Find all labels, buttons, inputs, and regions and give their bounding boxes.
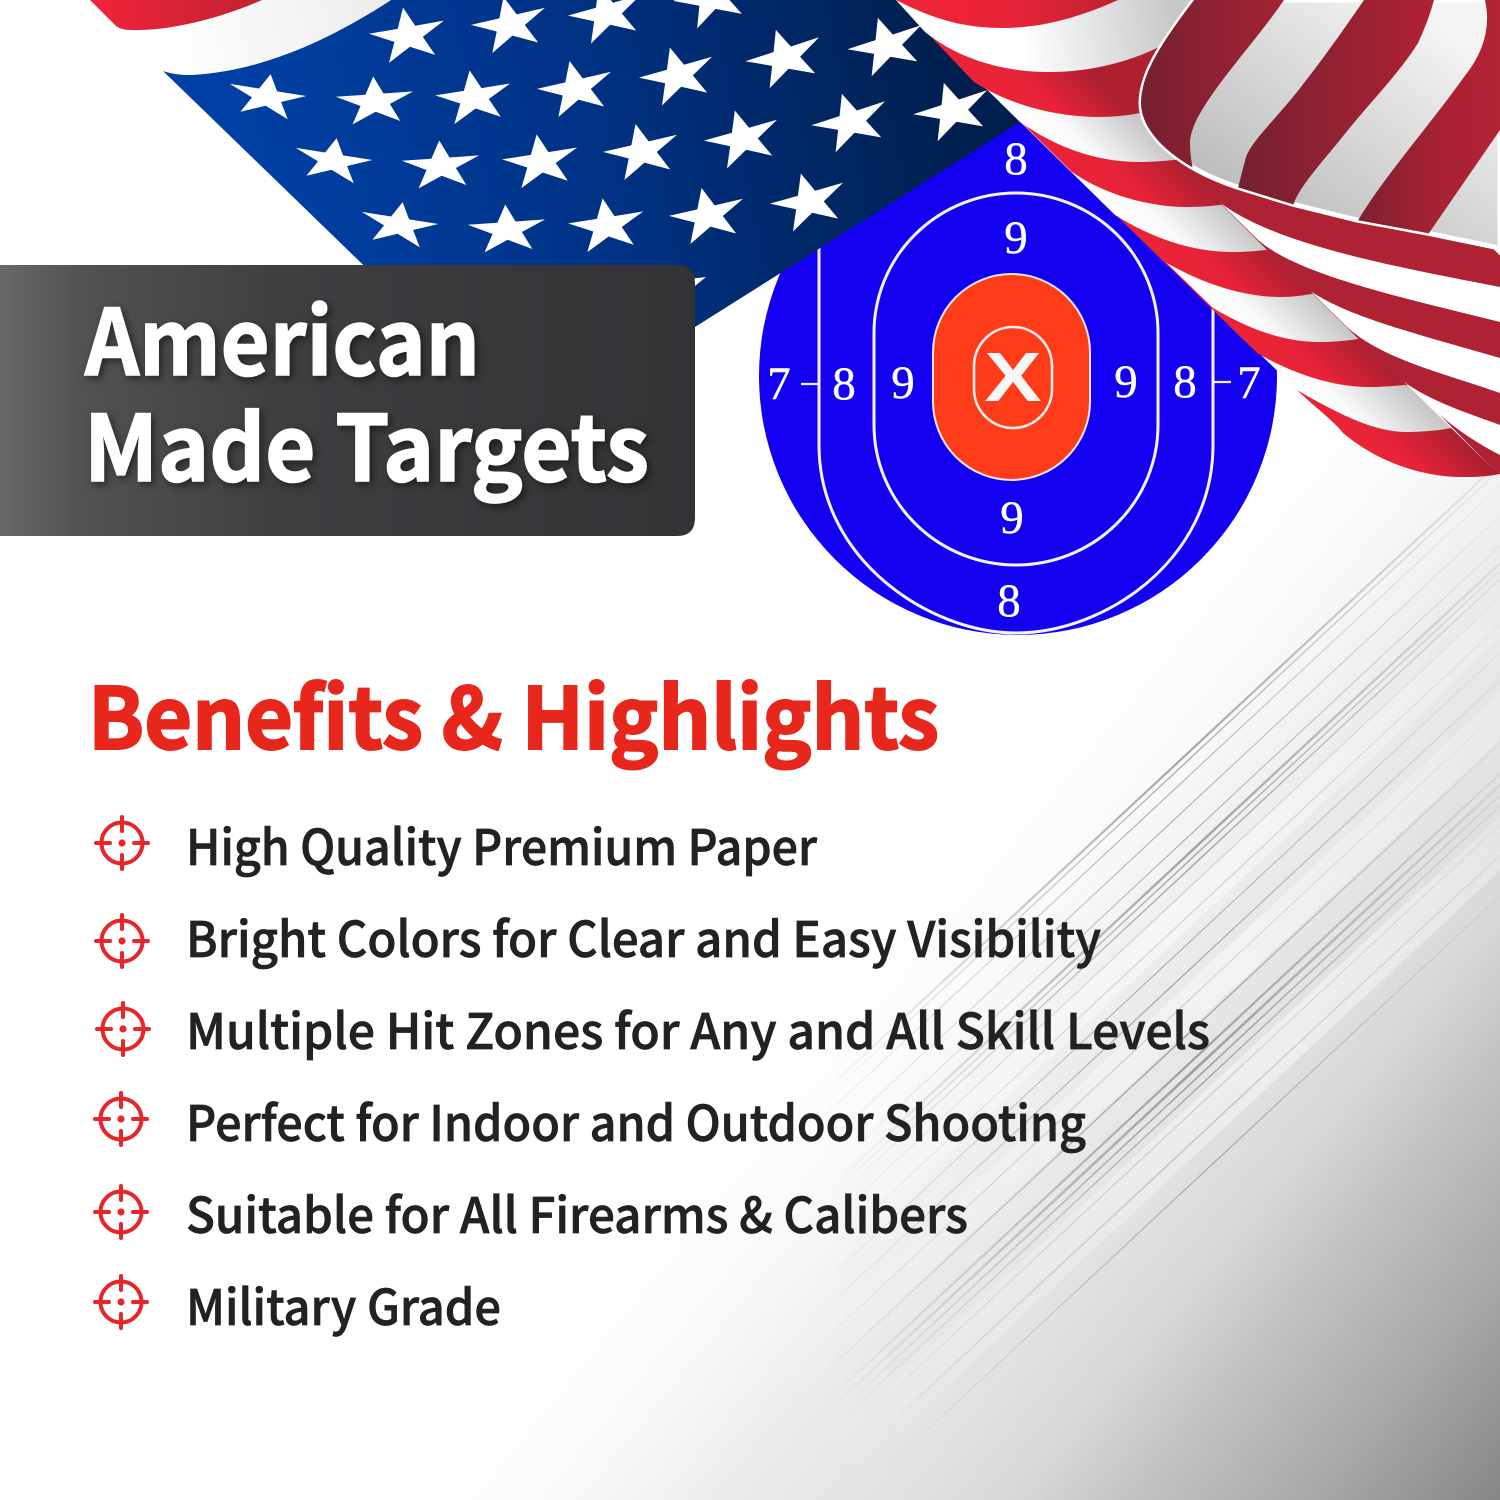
score numbers: 8 xyxy=(1004,133,1028,185)
flag stars xyxy=(226,0,997,290)
panel background xyxy=(0,265,695,536)
title text: Made Targets xyxy=(84,376,649,508)
title text: American xyxy=(84,270,480,402)
score numbers: 7 xyxy=(1237,357,1261,409)
score numbers: 8 xyxy=(1173,356,1197,408)
score numbers: 9 xyxy=(1000,492,1024,544)
benefit 4: Perfect for Indoor and Outdoor Shooting xyxy=(186,1085,1086,1156)
score numbers: 7 xyxy=(767,358,791,410)
score numbers: 9 xyxy=(1114,356,1138,408)
benefit 3: Multiple Hit Zones for Any and All Skill Levels xyxy=(186,993,1210,1064)
x mark: X xyxy=(984,338,1042,416)
x ring xyxy=(974,327,1052,428)
icon: crosshair 3 xyxy=(97,1003,149,1055)
score numbers: 9 xyxy=(1004,212,1028,264)
icon: crosshair 6 xyxy=(95,1276,147,1328)
title text xyxy=(84,270,649,508)
benefit 5: Suitable for All Firearms & Calibers xyxy=(186,1177,968,1248)
score numbers xyxy=(767,133,1261,627)
flag right stripes xyxy=(1172,150,1500,476)
score numbers: 9 xyxy=(891,357,915,409)
target: blue paper target xyxy=(759,117,1277,635)
middle ring line xyxy=(874,193,1158,565)
target disc xyxy=(759,117,1277,635)
flag canton xyxy=(163,0,1020,327)
benefit 6: Military Grade xyxy=(186,1269,501,1340)
score numbers: 8 xyxy=(832,358,856,410)
title panel xyxy=(0,265,695,536)
flag lower stripes xyxy=(896,0,1500,477)
benefit 2: Bright Colors for Clear and Easy Visibility xyxy=(186,901,1101,972)
icon: crosshair 4 xyxy=(95,1093,147,1145)
outer ring line xyxy=(819,200,1213,633)
background diagonal streaks xyxy=(632,384,1500,1500)
benefit 1: High Quality Premium Paper xyxy=(186,809,818,880)
icon: crosshair 1 xyxy=(96,817,148,869)
icon: crosshair 2 xyxy=(96,915,148,967)
score numbers: 8 xyxy=(997,575,1021,627)
orange bullseye xyxy=(933,274,1090,480)
flag top-left stripes xyxy=(90,0,391,75)
heading: Benefits & Highlights xyxy=(88,651,939,774)
flag curl xyxy=(1125,0,1500,252)
score ticks xyxy=(801,382,1231,384)
icon: crosshair 5 xyxy=(95,1186,147,1238)
